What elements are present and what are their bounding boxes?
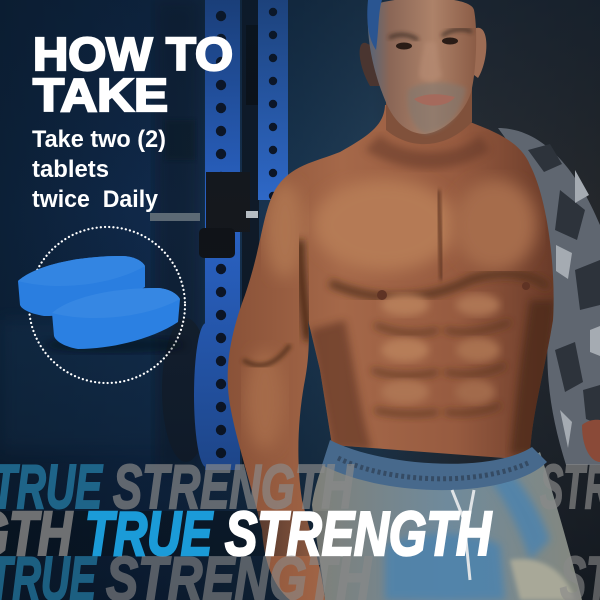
icon: blue tablets — [18, 256, 185, 353]
slogan row 2: TRUE — [85, 500, 213, 569]
tablet 2 — [52, 288, 180, 349]
instructions: Take two (2) — [32, 126, 166, 153]
lifting belt — [498, 128, 600, 465]
instructions — [32, 126, 166, 213]
instructions: twice Daily — [32, 186, 159, 213]
dark band behind slogan — [0, 511, 340, 556]
nose — [419, 42, 442, 81]
drawstring — [452, 490, 474, 580]
heading: TAKE — [33, 69, 168, 121]
slogan row 3 — [0, 545, 600, 600]
slogan row 1: STRENGTH — [113, 453, 354, 522]
heading — [33, 28, 233, 121]
j-hook — [150, 172, 258, 258]
weight plate — [162, 318, 218, 467]
slogan row 1 — [0, 453, 600, 522]
eyes and brows — [389, 29, 472, 40]
ears — [360, 43, 380, 86]
far hand — [582, 420, 600, 462]
mouth — [414, 94, 455, 106]
beard stubble — [407, 82, 466, 134]
man — [228, 0, 600, 600]
rack uprights — [205, 0, 297, 475]
neck — [386, 80, 472, 144]
blue hair shadow — [367, 0, 382, 50]
dotted circle — [29, 227, 185, 383]
instructions: tablets — [32, 156, 109, 183]
torso and arm — [228, 100, 554, 600]
muscle shading — [243, 135, 556, 455]
slogan row 2: STRENGTH — [225, 500, 492, 569]
slogan row 2 — [0, 500, 492, 569]
tablet 1 — [18, 256, 145, 316]
shorts — [312, 440, 582, 600]
heading: HOW TO — [33, 28, 233, 80]
waistband — [322, 440, 547, 490]
head — [360, 0, 486, 144]
face — [368, 0, 476, 134]
